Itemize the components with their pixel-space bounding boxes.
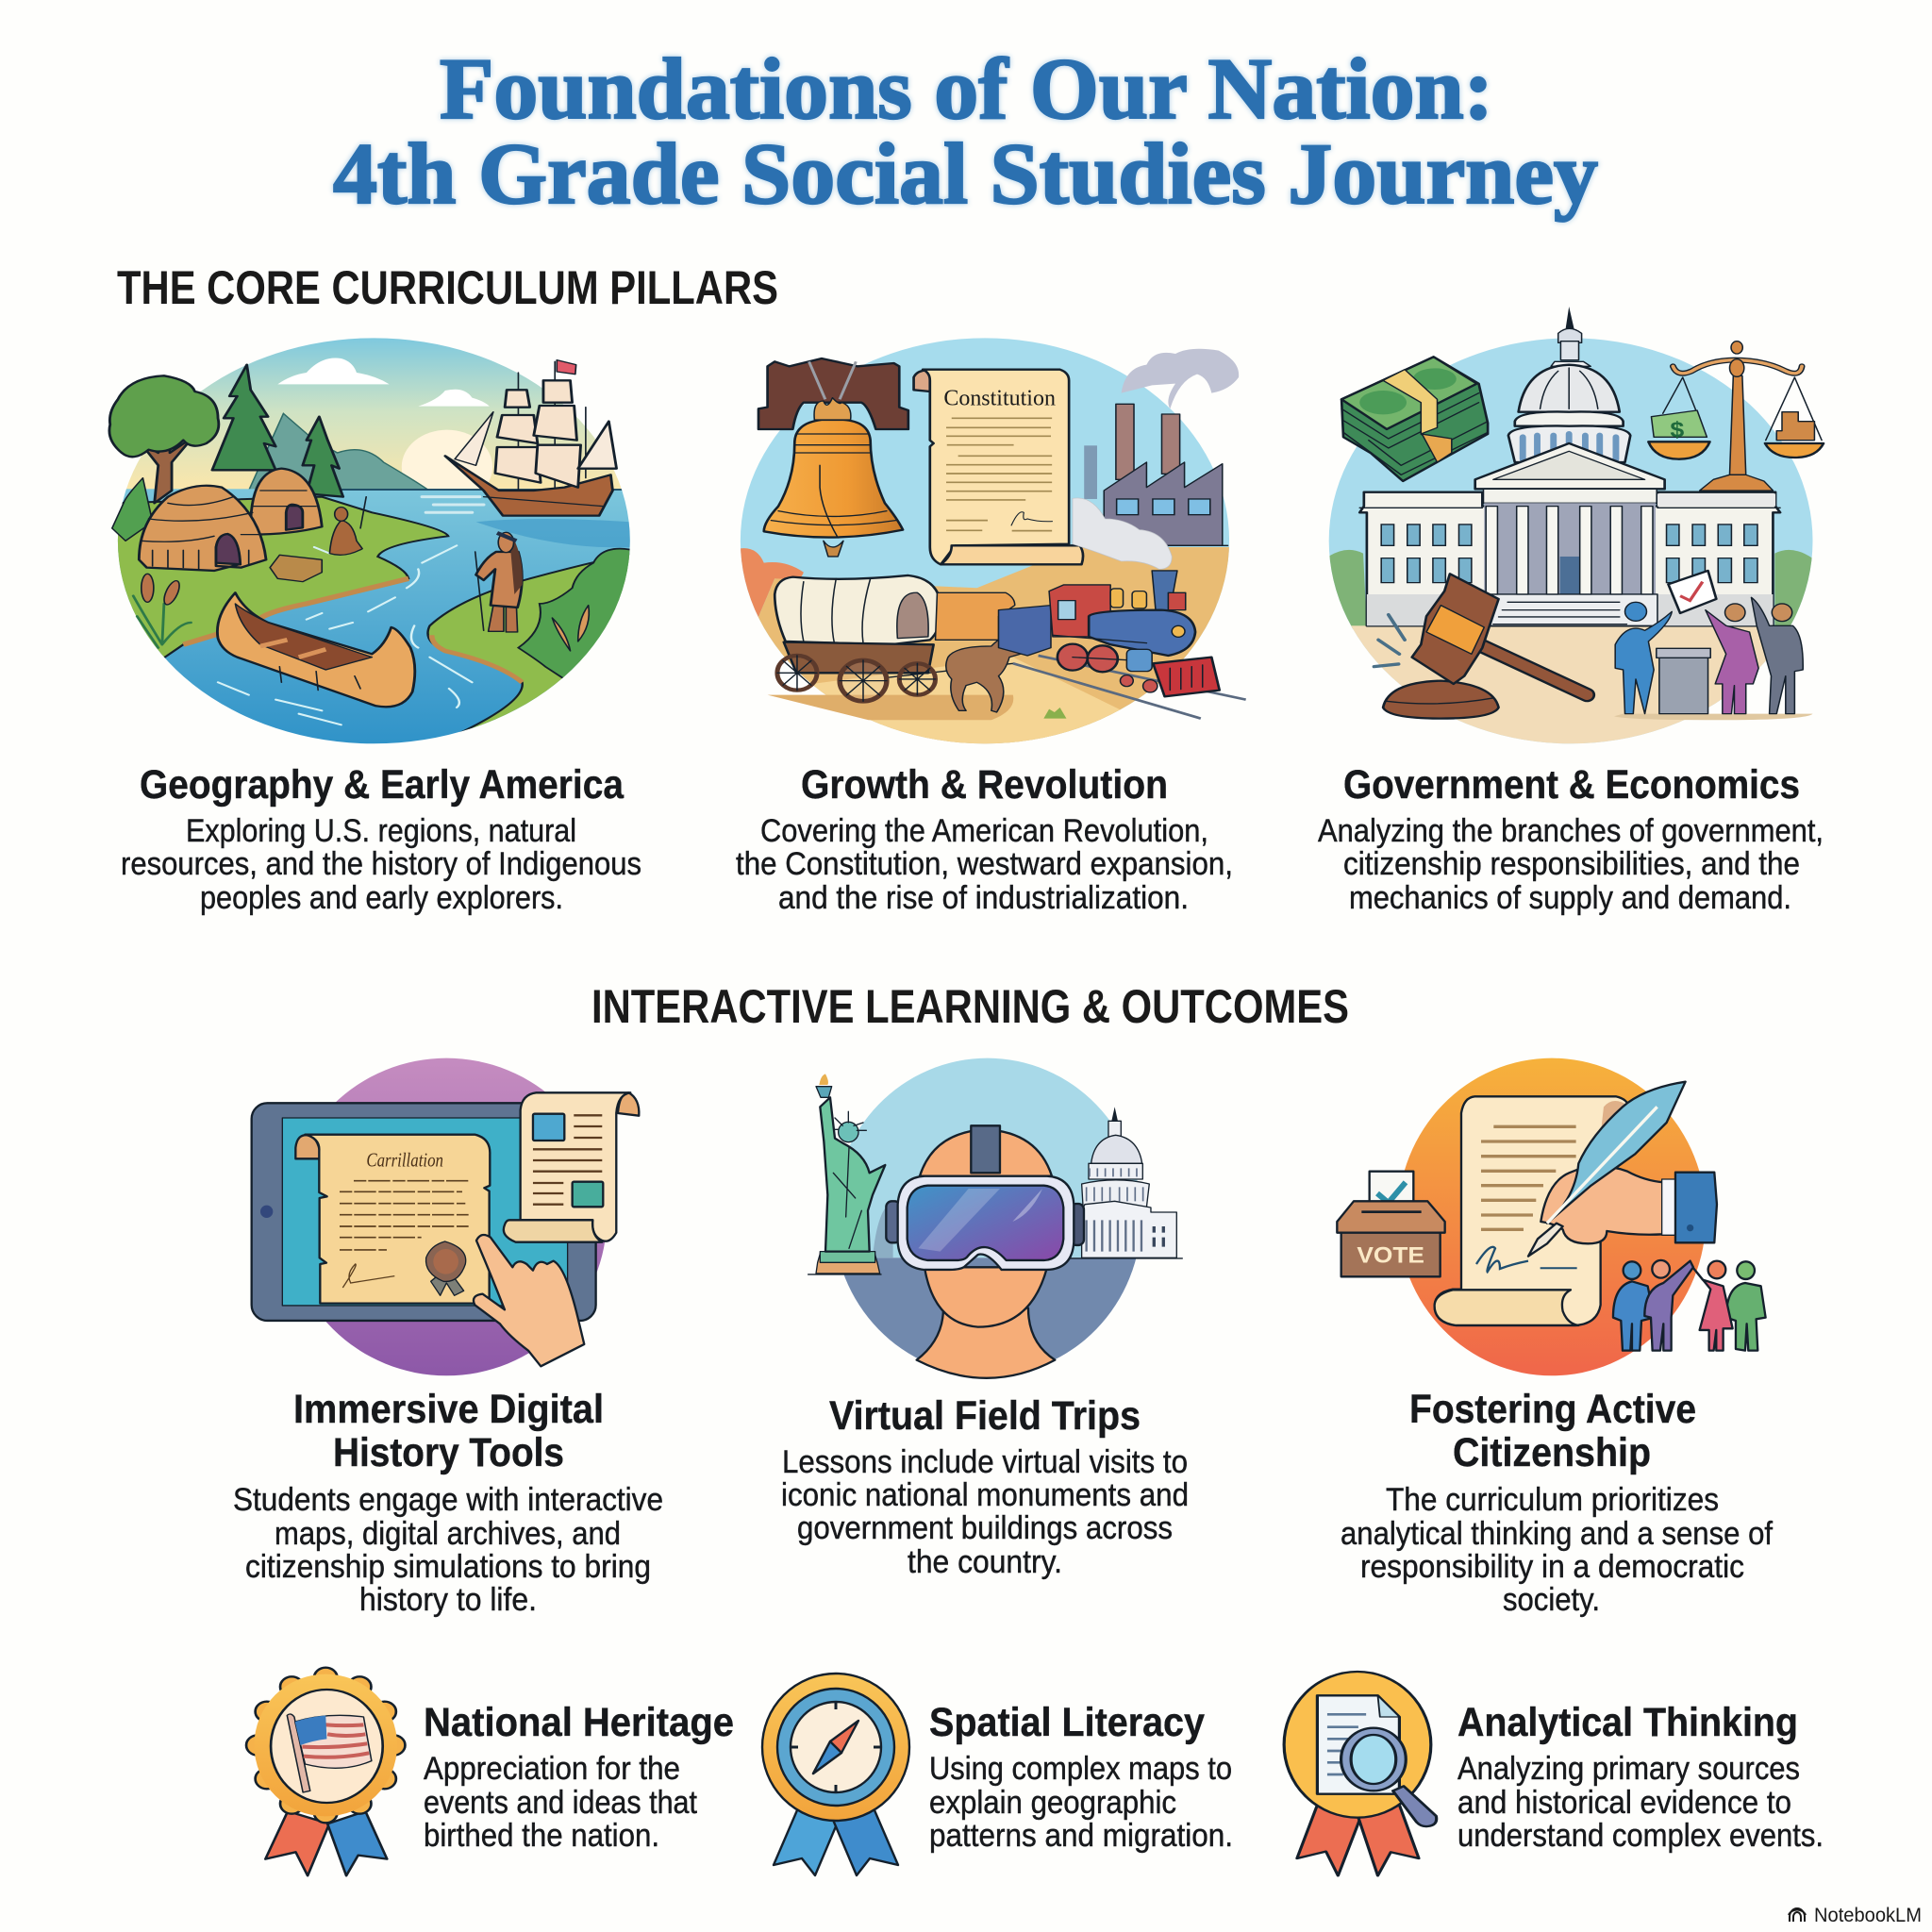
icon: locomotive	[999, 571, 1220, 696]
text: spatial literacy: Using complex maps to	[929, 1751, 1232, 1787]
panel: government text: mechanics of supply and demand.	[1349, 880, 1791, 916]
icon: standing person	[475, 532, 523, 632]
icon: certificate scroll	[295, 1135, 490, 1304]
icon: huts	[139, 469, 322, 571]
panel: virtual field trips text: Virtual Field Trips	[829, 1393, 1141, 1439]
panel: digital tools text: History Tools	[333, 1430, 564, 1475]
icon: pointing hand	[474, 1235, 584, 1366]
panel: digital tools text: history to life.	[359, 1582, 537, 1618]
panel: virtual field trips text: the country.	[908, 1544, 1062, 1580]
panel: digital tools illustration	[252, 1058, 639, 1375]
icon: voters and ballot	[1614, 571, 1813, 720]
icon: parchment	[1435, 1096, 1629, 1325]
panel: active citizenship text: responsibility in a democratic	[1360, 1549, 1744, 1585]
panel: government text: Analyzing the branches of government,	[1318, 813, 1824, 849]
panel: government text	[1318, 762, 1824, 916]
icon: capitol dome	[1508, 307, 1630, 462]
badge: spatial literacy	[762, 1674, 909, 1875]
icon: gavel	[1374, 574, 1587, 719]
icon: magnifying glass	[1341, 1728, 1437, 1826]
badge: national heritage	[246, 1668, 405, 1875]
text: spatial literacy: explain geographic	[929, 1785, 1176, 1821]
icon: VR headset	[886, 1176, 1084, 1270]
scene background	[1324, 333, 1829, 752]
icon: money stacks	[1341, 357, 1488, 481]
icon: capitol building	[1359, 443, 1780, 625]
panel: active citizenship text: Fostering Active	[1409, 1387, 1696, 1432]
ribbons	[774, 1804, 898, 1875]
panel: digital tools text: Students engage with interactive	[233, 1482, 663, 1518]
text: national heritage	[424, 1700, 734, 1854]
badge: analytical thinking	[1284, 1672, 1437, 1875]
icon: group of people	[1613, 1260, 1766, 1351]
text: vote: VOTE	[1357, 1242, 1424, 1268]
panel: geography text: peoples and early explorers.	[200, 880, 563, 916]
title	[333, 41, 1598, 222]
panel: growth text	[736, 762, 1233, 916]
panel: active citizenship text: Citizenship	[1453, 1430, 1651, 1475]
panel: geography text: Exploring U.S. regions, natural	[186, 813, 576, 849]
title: Foundations of Our Nation:	[440, 41, 1493, 137]
icon: wood pile	[270, 555, 322, 582]
icon: canoe	[217, 592, 415, 707]
text: analytical thinking: Analytical Thinking	[1457, 1700, 1798, 1745]
panel: active citizenship text	[1341, 1387, 1774, 1618]
panel: growth illustration	[731, 333, 1246, 748]
background circle	[843, 1058, 1138, 1359]
icon: document	[1317, 1695, 1399, 1794]
panel: virtual field trips text: iconic national monuments and	[781, 1477, 1189, 1513]
icon: steam	[1073, 498, 1172, 569]
panel: growth text: and the rise of industrialization.	[778, 880, 1189, 916]
panel: digital tools text	[233, 1387, 663, 1618]
icon: cattail right	[161, 579, 182, 607]
compass medal	[762, 1674, 909, 1821]
purple circle	[286, 1058, 607, 1375]
text: analytical thinking: and historical evidence to	[1457, 1785, 1791, 1821]
icon: factory	[1084, 349, 1239, 545]
text: national heritage: events and ideas that	[424, 1785, 697, 1821]
panel: digital tools text: maps, digital archives, and	[275, 1516, 621, 1552]
panel: active citizenship text: society.	[1503, 1582, 1600, 1618]
panel: virtual field trips text	[781, 1393, 1189, 1580]
heading: core curriculum pillars: THE CORE CURRICULUM PILLARS	[117, 261, 778, 314]
panel: government illustration	[1324, 307, 1829, 752]
text: constitution: Constitution	[943, 385, 1056, 410]
text: spatial literacy: Spatial Literacy	[929, 1700, 1205, 1745]
panel: virtual field trips text: government buildings across	[797, 1510, 1173, 1546]
icon: cattail left	[142, 574, 154, 602]
icon: grass	[1043, 708, 1066, 719]
icon: ship	[445, 360, 617, 516]
icon: pines	[112, 365, 343, 541]
icon: tree	[109, 375, 219, 503]
icon: liberty bell	[758, 358, 908, 557]
icon: covered wagon	[768, 575, 1013, 720]
heading: interactive learning: INTERACTIVE LEARNING & OUTCOMES	[591, 980, 1349, 1033]
text: analytical thinking: understand complex events.	[1457, 1818, 1824, 1854]
icon: statue of liberty	[808, 1074, 885, 1274]
panel: active citizenship illustration	[1337, 1058, 1766, 1375]
text: dollar sign: $	[1670, 418, 1684, 442]
panel: geography text: resources, and the history of Indigenous	[121, 846, 641, 882]
panel: active citizenship text: analytical thinking and a sense of	[1341, 1516, 1774, 1552]
panel: geography text: Geography & Early America	[140, 762, 625, 808]
panel: active citizenship text: The curriculum prioritizes	[1386, 1482, 1719, 1518]
scene background	[114, 333, 634, 748]
text: certificate heading: Carrillation	[366, 1151, 443, 1172]
text: spatial literacy: patterns and migration.	[929, 1818, 1233, 1854]
ribbons	[1297, 1805, 1419, 1875]
scalloped medal	[246, 1668, 405, 1823]
icon: capitol	[1069, 1107, 1182, 1258]
icon: rail tracks	[1013, 656, 1246, 719]
title: 4th Grade Social Studies Journey	[333, 125, 1598, 222]
icon: right reeds	[552, 606, 589, 651]
text: national heritage: National Heritage	[424, 1700, 734, 1745]
panel: growth text: Covering the American Revolution,	[760, 813, 1208, 849]
panel: virtual field trips illustration	[808, 1054, 1182, 1384]
text: national heritage: Appreciation for the	[424, 1751, 680, 1787]
icon: hand with quill	[1528, 1082, 1717, 1257]
icon: head and neck	[917, 1125, 1055, 1378]
panel: digital tools text: citizenship simulations to bring	[245, 1549, 651, 1585]
icon: reeds	[133, 596, 191, 648]
icon: passenger car	[936, 592, 1015, 640]
text: analytical thinking: Analyzing primary sources	[1457, 1751, 1800, 1787]
panel: digital tools text: Immersive Digital	[293, 1387, 604, 1432]
panel: government text: citizenship responsibilities, and the	[1343, 846, 1800, 882]
panel: government text: Government & Economics	[1343, 762, 1800, 808]
panel: virtual field trips text: Lessons include virtual visits to	[782, 1444, 1188, 1480]
panel: geography illustration	[109, 333, 634, 748]
icon: tablet	[252, 1103, 596, 1321]
text: national heritage: birthed the nation.	[424, 1818, 659, 1854]
medal disc	[1284, 1672, 1431, 1818]
text: spatial literacy	[929, 1700, 1233, 1854]
panel: growth text: Growth & Revolution	[801, 762, 1168, 808]
ribbons	[265, 1811, 387, 1875]
watermark: NotebookLM: NotebookLM	[1814, 1905, 1922, 1926]
icon: horse	[946, 630, 1031, 712]
icon: balance scales	[1648, 341, 1824, 491]
icon: ballot box	[1337, 1172, 1445, 1276]
icon: constitution scroll	[914, 370, 1083, 564]
orange circle	[1398, 1058, 1706, 1375]
panel: growth text: the Constitution, westward expansion,	[736, 846, 1233, 882]
icon: small document	[504, 1092, 639, 1242]
text: analytical thinking	[1457, 1700, 1824, 1854]
icon: flag	[287, 1714, 372, 1792]
panel: geography text	[121, 762, 641, 916]
icon: seated person	[329, 497, 366, 555]
scene background	[731, 333, 1237, 748]
